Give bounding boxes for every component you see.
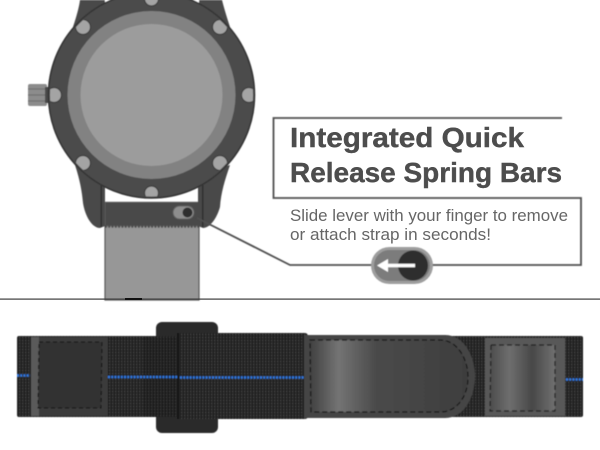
callout frame [197, 118, 581, 265]
keeper loop [156, 322, 218, 433]
watch crown [28, 84, 49, 106]
watch dial [80, 24, 222, 166]
callout heading [290, 122, 562, 188]
quick release lever [173, 206, 194, 219]
middle leather tab [304, 335, 475, 418]
watch lugs [72, 0, 231, 228]
woven band [17, 333, 583, 419]
right leather patch [485, 338, 565, 416]
left leather patch [31, 337, 108, 416]
icon: slide lever with arrow [371, 247, 433, 284]
callout description [290, 207, 568, 244]
watch illustration [28, 0, 256, 300]
blue stripe [17, 376, 583, 380]
callout heading: Integrated Quick [290, 122, 524, 153]
divider line [0, 298, 600, 300]
callout description: Slide lever with your finger to remove [290, 207, 568, 225]
bezel markers [46, 0, 256, 200]
callout description: or attach strap in seconds! [290, 226, 491, 244]
watch case and bezel [48, 0, 254, 198]
callout heading: Release Spring Bars [290, 157, 562, 188]
bezel inner ring [68, 11, 236, 179]
product photo: strap [17, 322, 583, 433]
watch strap [105, 202, 199, 300]
